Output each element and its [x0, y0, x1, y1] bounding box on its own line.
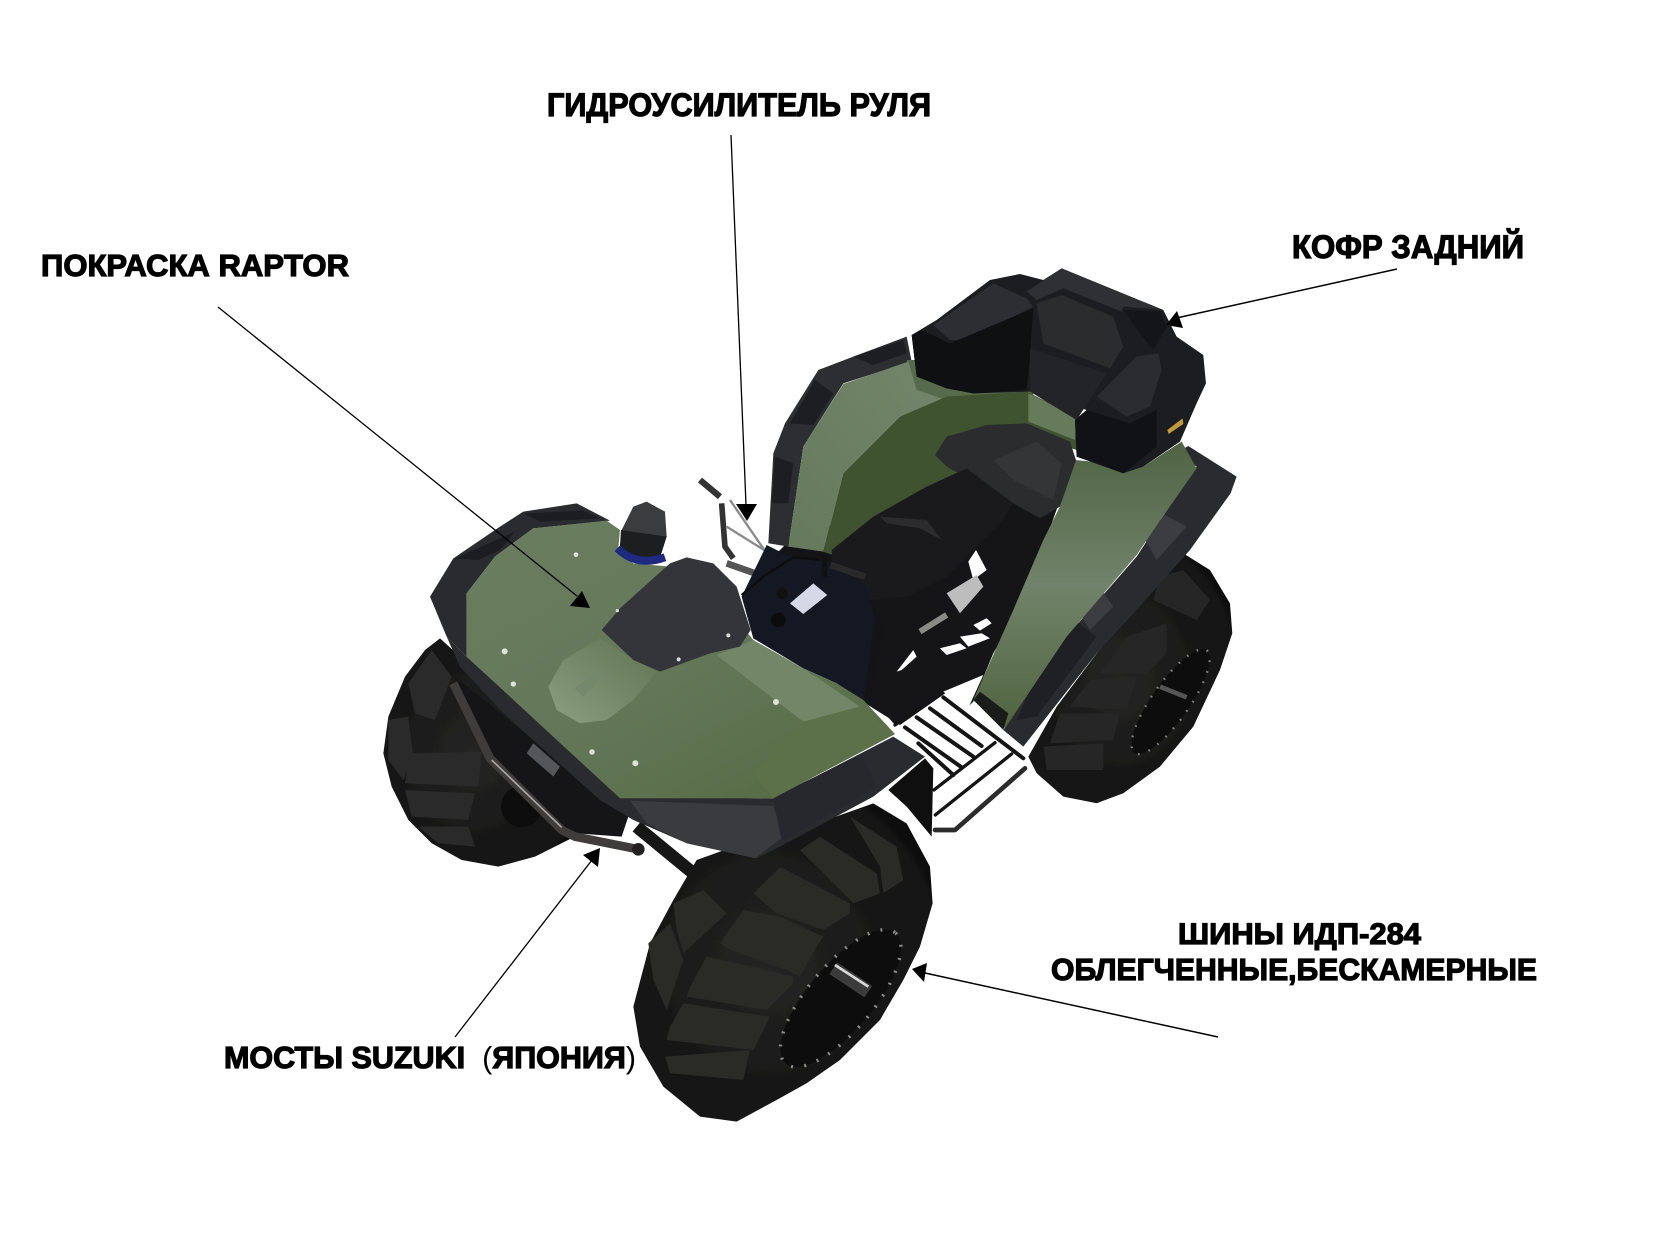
hood rivets: [502, 552, 779, 766]
front tire tread lugs: [648, 817, 903, 1080]
label: Raptor paint: ПОКРАСКА RAPTOR: [41, 248, 349, 283]
handlebar left: [700, 480, 767, 573]
arrowhead: power steering: [736, 504, 757, 521]
trunk left front: [912, 308, 1033, 393]
rear left fender outer trim: [768, 337, 912, 547]
front wheel rim: [761, 912, 921, 1085]
beacon: [617, 502, 667, 561]
arrowhead: rear trunk: [1166, 311, 1183, 328]
control console: [742, 545, 875, 703]
label: power steering: ГИДРОУСИЛИТЕЛЬ РУЛЯ: [547, 87, 931, 123]
exhaust pipe: [920, 615, 947, 632]
rear fender inner light facet: [1028, 393, 1077, 440]
trunk right lid: [1097, 353, 1162, 417]
rear right tire: [1028, 553, 1232, 803]
rear section of the vehicle: [768, 268, 1237, 747]
front hood green panel: [467, 521, 895, 798]
engine and frame under seat: [870, 500, 1060, 725]
label: rear trunk: КОФР ЗАДНИЙ: [1292, 229, 1524, 265]
trunk box: [912, 268, 1206, 473]
hood front facet: [753, 707, 895, 798]
rear right fender black outer: [1003, 446, 1237, 747]
green backing under trunk: [907, 360, 1033, 400]
gear knobs: [777, 588, 788, 599]
front section of the vehicle: [430, 480, 925, 873]
trunk reflector: [1167, 418, 1183, 434]
bumper bracket: [455, 677, 628, 837]
cables and right handlebar: [742, 555, 865, 595]
front right tire: [633, 803, 933, 1122]
arrowhead: painting: [570, 591, 590, 608]
front lower strip: [630, 801, 783, 858]
trunk rear patch: [1123, 310, 1167, 350]
front top-left black trim: [430, 503, 610, 657]
label: tires line 1: ШИНЫ ИДП-284: [1178, 918, 1421, 951]
axle arm: [637, 827, 693, 873]
rear fender inner shade: [823, 392, 1077, 560]
gaps inside frame: [897, 550, 992, 712]
hood bump: [548, 638, 657, 723]
rear wheel rim: [1119, 640, 1222, 764]
illustration: green ATV: [383, 268, 1237, 1122]
hood right facet: [717, 640, 860, 722]
front body black lower trim: [447, 637, 925, 858]
rear hub bar: [1160, 687, 1187, 697]
trunk backrest cushion: [1037, 295, 1123, 368]
windshield: [602, 557, 751, 672]
main seat: [832, 468, 1013, 600]
rear right fender green panel: [973, 442, 1197, 728]
fender lower black tip: [973, 692, 1008, 730]
label: tires line 2: ОБЛЕГЧЕННЫЕ,БЕСКАМЕРНЫЕ: [1051, 952, 1537, 987]
left front tire: [383, 638, 582, 867]
dark backing behind the seat and console: [760, 500, 1010, 725]
callout: painting line: [218, 307, 590, 608]
trunk top surface: [1027, 268, 1163, 312]
label: Suzuki axles: МОСТЫ SUZUKI (ЯПОНИЯ): [224, 1040, 636, 1075]
front corner panel: [773, 755, 877, 842]
front bumper: [453, 683, 645, 856]
trunk left lid: [933, 283, 1033, 340]
hub shaft: [833, 968, 868, 992]
rear left fender green panel: [788, 362, 947, 552]
arrowhead: axles: [583, 848, 600, 867]
callout: axles line: [455, 848, 600, 1037]
shift plate: [790, 583, 827, 614]
trunk lower panel: [1030, 348, 1107, 420]
seat back pad: [935, 423, 1076, 518]
callout: power steering line: [731, 135, 757, 521]
callout: tires line: [912, 963, 1218, 1037]
trunk right front: [1075, 410, 1157, 473]
arrowhead: tires: [912, 963, 927, 982]
mud flap: [888, 758, 933, 837]
stored bag: [947, 575, 983, 613]
callout: rear trunk line: [1166, 269, 1397, 328]
bracket logo plate: [527, 743, 560, 777]
footrest rack: [895, 697, 1025, 830]
